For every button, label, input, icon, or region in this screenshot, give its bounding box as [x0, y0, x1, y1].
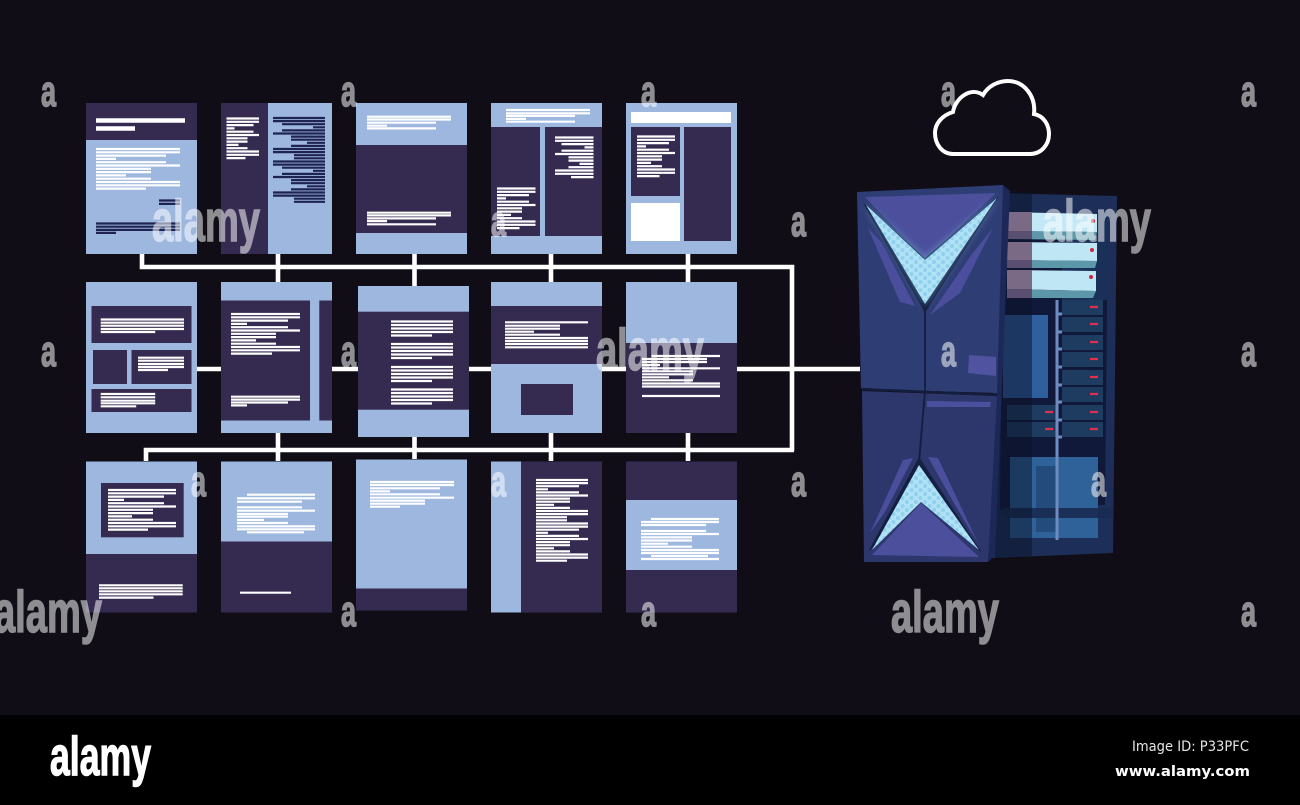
- connector lines: [142, 254, 860, 461]
- lower purple panel: [872, 503, 979, 557]
- text lines: [536, 480, 588, 561]
- lower chevron wings: [870, 458, 913, 533]
- footer band: [0, 715, 1300, 805]
- watermark: large: alamy: [596, 318, 704, 383]
- text lines: [506, 110, 590, 122]
- panel: document row 3, column 3: [356, 460, 467, 610]
- watermark: small: a: [941, 327, 956, 376]
- left column text: [497, 188, 536, 228]
- panel: document row 1, column 5: [626, 103, 737, 254]
- watermark: small: a: [341, 587, 356, 636]
- text lines: [108, 490, 176, 530]
- upper light chevron: [866, 198, 997, 304]
- lower text lines: [99, 585, 183, 598]
- upper purple panel: [865, 193, 996, 260]
- cloud icon: [935, 81, 1049, 154]
- upper chevron shadow: [863, 196, 999, 313]
- text lines: [637, 136, 675, 176]
- text lines: [641, 519, 719, 559]
- watermark: small: a: [641, 67, 656, 116]
- lower light chevron: [872, 465, 979, 550]
- watermark: large: alamy: [152, 189, 260, 254]
- watermark: small: a: [491, 457, 506, 506]
- dimmed drawer fronts: [1007, 212, 1032, 298]
- watermark: large: alamy: [891, 580, 999, 645]
- watermark: large: [0, 189, 1151, 645]
- watermark: small: a: [191, 457, 206, 506]
- text lines: [101, 320, 184, 406]
- watermark: small: a: [1241, 327, 1256, 376]
- cabinet door: [857, 185, 1010, 562]
- panel: document row 3, column 5: [626, 462, 737, 612]
- text lines: [96, 149, 180, 189]
- watermark: small: a: [1241, 587, 1256, 636]
- title bars: [96, 120, 185, 128]
- watermark: small: a: [41, 327, 56, 376]
- caption line: [240, 592, 291, 594]
- status leds: [1045, 307, 1098, 429]
- panel: document row 2, column 3: [358, 286, 469, 437]
- panel: document row 3, column 4: [491, 462, 602, 612]
- text lines: [505, 322, 588, 347]
- watermark: small: a: [341, 67, 356, 116]
- text lines: [237, 495, 315, 532]
- panel: document row 3, column 2: [221, 462, 332, 612]
- panel: document row 1, column 4: [491, 103, 602, 254]
- text lines: [391, 322, 453, 404]
- text lines: [231, 314, 300, 405]
- lower blocks: [1010, 457, 1098, 538]
- footer logo: alamy: [50, 725, 151, 787]
- panel: document row 1, column 3: [356, 103, 467, 254]
- blue block: [1003, 315, 1048, 398]
- panel: document row 3, column 1: [86, 462, 197, 612]
- panel: document row 2, column 1: [86, 282, 197, 433]
- lower chevron shadow: [868, 457, 982, 553]
- upper chevron wings: [868, 228, 915, 306]
- watermark: small: a: [41, 67, 56, 116]
- panel: document row 1, column 2: [221, 103, 332, 254]
- website: www.alamy.com: [1115, 764, 1250, 780]
- rail: [1057, 300, 1062, 540]
- panel: document row 1, column 1: [86, 103, 197, 254]
- watermark: small: a: [941, 67, 956, 116]
- panel: document row 2, column 2: [221, 282, 332, 433]
- panel: document row 2, column 5: [626, 282, 737, 433]
- drawers: [1007, 212, 1097, 298]
- text lines: [642, 356, 720, 396]
- text lines: [370, 482, 454, 507]
- watermark: small: a: [491, 197, 506, 246]
- image id: Image ID: P33PFC: [1132, 739, 1249, 755]
- open cabinet: [992, 192, 1117, 558]
- server units: [1007, 300, 1103, 437]
- watermark: small: a: [641, 587, 656, 636]
- server rack: [857, 185, 1117, 562]
- panel: document row 2, column 4: [491, 282, 602, 433]
- dark text lines: [273, 118, 325, 202]
- watermark: small: a: [1241, 67, 1256, 116]
- watermark: small: a: [791, 457, 806, 506]
- lower door bar: [927, 401, 991, 407]
- watermark: small: a: [791, 197, 806, 246]
- watermark: large: alamy: [1043, 189, 1151, 254]
- text lines: [367, 117, 451, 224]
- watermark: small: a: [341, 327, 356, 376]
- watermark: small: [41, 67, 1256, 636]
- watermark: small: a: [1091, 457, 1106, 506]
- text lines: [226, 118, 259, 158]
- right column text: [555, 138, 594, 177]
- door label plate: [968, 355, 996, 376]
- dark text lines: [96, 200, 180, 233]
